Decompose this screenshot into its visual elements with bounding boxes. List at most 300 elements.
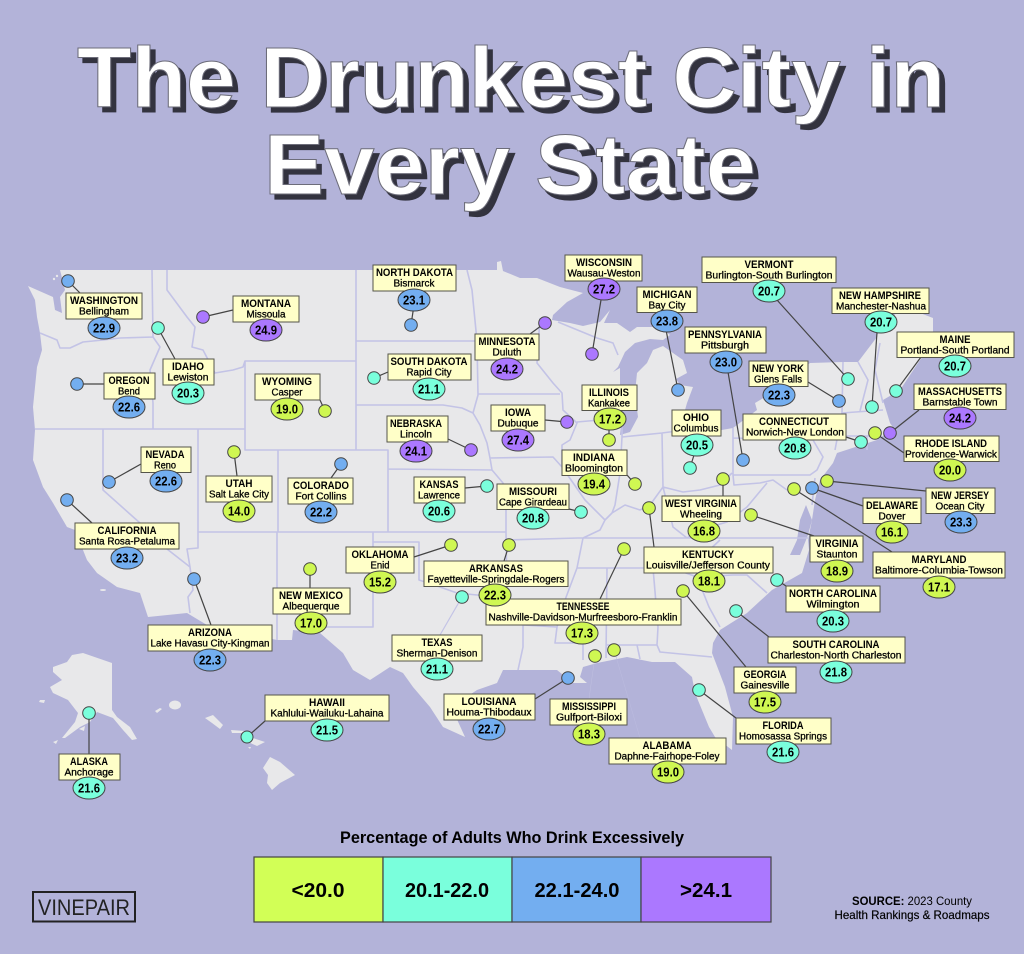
source note: SOURCE: 2023 County	[852, 894, 972, 908]
title: The Drunkest City in	[77, 31, 945, 126]
value: 17.1	[928, 580, 950, 594]
label	[562, 450, 627, 476]
label: SOUTH CAROLINA	[792, 639, 880, 651]
label: MARYLAND	[912, 554, 967, 566]
label: Nashville-Davidson-Murfreesboro-Franklin	[488, 612, 678, 624]
leader line	[589, 656, 595, 699]
callout: Kansas	[414, 477, 493, 522]
label: Gulfport-Biloxi	[556, 712, 622, 724]
value: 19.0	[276, 402, 298, 416]
pin	[821, 475, 833, 487]
value	[753, 280, 785, 302]
label	[873, 552, 1005, 578]
callout: North Dakota	[373, 265, 456, 331]
label: Casper	[272, 386, 303, 398]
value: 20.0	[939, 462, 961, 478]
label: Columbus	[674, 422, 718, 434]
value: 21.5	[316, 722, 338, 738]
label: GEORGIA	[744, 669, 787, 681]
leader line	[608, 425, 610, 440]
value: 18.3	[578, 726, 600, 742]
source note: Health Rankings & Roadmaps	[834, 908, 990, 922]
callout: Idaho	[152, 322, 214, 404]
label: NEW MEXICO	[279, 590, 343, 602]
pin	[629, 478, 641, 490]
pin	[890, 385, 902, 397]
label	[75, 523, 179, 549]
label: Bloomington	[565, 462, 623, 474]
label	[904, 436, 999, 462]
label: Baltimore-Columbia-Towson	[875, 564, 1003, 576]
label: LOUISIANA	[462, 696, 517, 708]
leader line	[535, 678, 568, 699]
callout: South Dakota	[368, 354, 471, 400]
label	[734, 667, 796, 693]
leader line	[846, 437, 861, 442]
callout: Utah	[206, 446, 272, 522]
legend swatch: under 20.0: <20.0	[292, 880, 344, 902]
label	[702, 257, 836, 282]
legend swatch: over 24.1: >24.1	[680, 880, 732, 902]
label: IOWA	[505, 407, 531, 419]
label: Burlington-South Burlington	[706, 270, 833, 282]
pin	[717, 473, 729, 485]
pin	[228, 446, 240, 458]
callout: Minnesota	[475, 317, 551, 380]
callout: Louisiana	[444, 672, 574, 740]
label: Dover	[878, 510, 906, 522]
label: Gainesville	[740, 680, 790, 692]
pin	[608, 644, 620, 656]
leader line	[890, 410, 919, 433]
label: Salt Lake City	[209, 488, 270, 500]
callout: Delaware	[806, 482, 921, 543]
callout: Ohio	[672, 410, 721, 474]
pin	[465, 444, 477, 456]
label	[637, 287, 697, 312]
label: Santa Rosa-Petaluma	[79, 536, 175, 548]
label	[497, 484, 569, 510]
label: WYOMING	[262, 376, 312, 388]
leader line	[683, 591, 746, 667]
label	[104, 373, 155, 399]
callout: Kentucky	[643, 502, 773, 592]
label: NEW JERSEY	[931, 490, 990, 502]
callout: Oregon	[71, 373, 155, 418]
label	[273, 588, 350, 614]
label: Daphne-Fairhope-Foley	[614, 750, 720, 762]
callout: Iowa	[491, 405, 573, 451]
value: 24.1	[405, 444, 427, 458]
title	[77, 31, 950, 218]
label: ALASKA	[70, 756, 108, 768]
pin	[737, 454, 749, 466]
leader line	[320, 400, 325, 411]
value	[923, 576, 955, 598]
pin	[368, 372, 380, 384]
pin	[456, 591, 468, 603]
callout: South Carolina	[730, 605, 905, 683]
legend	[254, 828, 771, 922]
callout: California	[61, 494, 179, 569]
title: The Drunkest City in	[82, 36, 950, 131]
label: NEW HAMPSHIRE	[839, 290, 921, 302]
label	[255, 374, 320, 400]
label	[387, 416, 448, 442]
label: Wausau-Weston	[568, 268, 641, 280]
value: 23.2	[116, 550, 138, 566]
callout: New Mexico	[273, 563, 350, 634]
label: Wheeling	[680, 508, 722, 520]
pin	[833, 395, 845, 407]
pin	[62, 275, 74, 287]
value	[311, 719, 343, 741]
label	[414, 477, 465, 503]
label: Dubuque	[498, 418, 539, 430]
callout: Tennessee	[486, 543, 681, 644]
pin	[197, 311, 209, 323]
label: Ocean City	[936, 500, 985, 512]
label: Glens Falls	[754, 374, 802, 386]
value: 22.3	[199, 652, 221, 668]
callout: Michigan	[637, 287, 697, 396]
label: Barnstable Town	[922, 396, 998, 408]
label: Kankakee	[588, 398, 630, 410]
leader line	[777, 580, 786, 586]
label	[672, 410, 721, 436]
logo: VinePair: VINEPAIR	[38, 895, 130, 920]
value: 23.8	[656, 314, 678, 328]
label: Staunton	[816, 548, 858, 560]
pin	[869, 427, 881, 439]
pin	[730, 605, 742, 617]
callout: Maryland	[788, 483, 1005, 598]
leader line	[777, 300, 848, 379]
label: WEST VIRGINIA	[665, 498, 737, 510]
leader line	[808, 382, 839, 401]
label	[550, 699, 627, 725]
leader line	[699, 690, 736, 718]
callout: Nebraska	[387, 416, 477, 462]
label	[141, 447, 191, 472]
legend swatch: over 24.1	[641, 857, 771, 922]
label: Norwich-New London	[746, 426, 844, 438]
callout: Mississippi	[550, 650, 627, 745]
label: MASSACHUSETTS	[918, 386, 1002, 398]
label	[786, 586, 880, 612]
label: Lake Havasu City-Kingman	[150, 638, 270, 650]
value: 16.8	[693, 524, 715, 538]
title: Every State	[269, 123, 761, 218]
value: 17.0	[300, 616, 322, 630]
label: Anchorage	[64, 766, 114, 778]
label: Wilmington	[806, 598, 860, 610]
leader line	[736, 611, 769, 637]
label: Kahlului-Wailuku-Lahaina	[270, 708, 384, 720]
callout: Pennsylvania	[685, 327, 766, 466]
label: DELAWARE	[866, 500, 918, 512]
label	[491, 405, 545, 431]
label: MICHIGAN	[642, 289, 692, 301]
label	[644, 547, 773, 573]
legend swatch: 20.1-22.0	[383, 857, 512, 922]
leader line	[331, 464, 341, 478]
leader line	[812, 488, 863, 506]
label: Bend	[118, 386, 140, 398]
label: NEBRASKA	[390, 418, 442, 430]
pin	[539, 317, 551, 329]
pin	[188, 573, 200, 585]
label	[749, 361, 808, 386]
pin	[693, 684, 705, 696]
label: SOUTH DAKOTA	[390, 356, 468, 368]
value: 23.0	[715, 354, 737, 370]
label: Charleston-North Charleston	[770, 650, 902, 662]
source note	[834, 894, 990, 922]
leader line	[722, 479, 724, 496]
label	[233, 296, 299, 322]
callout: Nevada	[103, 447, 191, 492]
callout: Rhode Island	[869, 427, 999, 481]
callout: Oklahoma	[346, 539, 457, 593]
label: MONTANA	[241, 298, 291, 310]
leader line	[88, 713, 90, 754]
label	[897, 332, 1014, 358]
value: 21.1	[418, 382, 440, 396]
label: WISCONSIN	[576, 257, 632, 269]
value: 17.2	[599, 412, 621, 426]
leader line	[77, 383, 104, 385]
value: 20.7	[870, 314, 892, 330]
label	[475, 334, 539, 360]
callout: North Carolina	[771, 574, 880, 632]
label: Lawrence	[418, 490, 460, 502]
leader line	[448, 439, 471, 450]
leader line	[414, 545, 451, 557]
value: 22.9	[93, 320, 115, 336]
label: INDIANA	[573, 452, 615, 464]
callout: Illinois	[582, 385, 637, 446]
label: Bismarck	[394, 278, 435, 290]
pin	[445, 539, 457, 551]
label	[206, 476, 272, 502]
label	[288, 478, 353, 504]
label	[59, 754, 120, 780]
label: Louisville/Jefferson County	[646, 560, 771, 572]
value: 27.2	[593, 282, 615, 296]
value: 22.3	[484, 588, 506, 602]
callout: New Jersey	[821, 475, 995, 533]
pin	[684, 462, 696, 474]
callout: Indiana	[562, 450, 641, 495]
map: Hawaii	[155, 700, 295, 790]
pin	[71, 378, 83, 390]
label: IDAHO	[172, 361, 204, 373]
label	[373, 265, 456, 291]
label: OHIO	[683, 412, 709, 424]
label: ILLINOIS	[589, 387, 629, 399]
value: 17.5	[754, 694, 776, 710]
label: UTAH	[226, 478, 253, 490]
pin	[503, 539, 515, 551]
value: 23.1	[403, 292, 425, 308]
leader line	[690, 455, 694, 468]
legend title: Percentage of Adults Who Drink Excessively	[340, 828, 685, 847]
pin	[562, 672, 574, 684]
label	[662, 496, 740, 522]
callout: Alaska	[59, 707, 120, 799]
value: 20.3	[822, 614, 844, 628]
label	[424, 561, 568, 586]
label	[768, 637, 905, 663]
pin	[335, 458, 347, 470]
callout: Colorado	[288, 458, 353, 523]
pin	[603, 434, 615, 446]
value: 21.6	[78, 780, 100, 796]
label	[66, 293, 142, 319]
label: Bay City	[648, 300, 686, 312]
callout: Vermont	[702, 257, 854, 385]
value	[820, 661, 852, 683]
label: ARKANSAS	[469, 563, 523, 575]
label: RHODE ISLAND	[915, 438, 987, 450]
pin	[103, 476, 115, 488]
leader line	[411, 305, 414, 325]
label: NORTH CAROLINA	[789, 588, 877, 600]
leader line	[627, 475, 635, 484]
leader line	[440, 597, 462, 635]
label	[743, 414, 846, 440]
label: WASHINGTON	[70, 295, 138, 307]
label: Fort Collins	[296, 490, 346, 502]
label	[148, 625, 272, 651]
label: Lincoln	[400, 428, 432, 440]
label: ALABAMA	[642, 740, 692, 752]
label: NEVADA	[146, 449, 185, 461]
label	[163, 359, 214, 385]
leader line	[504, 545, 509, 561]
label: OKLAHOMA	[352, 549, 409, 561]
pin	[771, 574, 783, 586]
leader line	[194, 579, 211, 625]
callout: Montana	[197, 296, 299, 341]
label: CALIFORNIA	[98, 525, 157, 537]
leader line	[728, 372, 743, 460]
leader line	[203, 310, 233, 317]
callout: Wisconsin	[565, 255, 642, 360]
pin	[405, 319, 417, 331]
callout: New York	[749, 361, 845, 407]
label: FLORIDA	[762, 720, 804, 732]
leader line	[614, 650, 640, 738]
label	[265, 695, 389, 721]
label: MAINE	[940, 334, 970, 346]
callout: New Hampshire	[832, 288, 929, 413]
leader line	[875, 433, 904, 453]
map: Alaska	[39, 653, 137, 744]
label: KANSAS	[420, 479, 458, 491]
label: TENNESSEE	[556, 601, 610, 613]
value: 27.4	[507, 432, 530, 448]
value: 22.3	[768, 388, 790, 402]
leader line	[600, 549, 624, 599]
label: Reno	[154, 460, 176, 472]
label	[444, 694, 535, 720]
label: HAWAII	[309, 697, 345, 709]
value: 21.1	[426, 662, 448, 676]
pin	[745, 509, 757, 521]
label	[388, 354, 471, 380]
label: MISSISSIPPI	[562, 701, 616, 713]
leader line	[465, 486, 487, 488]
callout: Arkansas	[424, 539, 568, 606]
value: 22.6	[155, 474, 177, 488]
label: MINNESOTA	[478, 336, 536, 348]
label: PENNSYLVANIA	[688, 329, 762, 341]
label: Duluth	[492, 346, 522, 358]
label	[926, 488, 995, 514]
title: Every State	[264, 118, 756, 213]
label	[685, 327, 766, 353]
callout: Texas	[392, 591, 482, 680]
label	[346, 547, 414, 573]
label	[392, 635, 482, 661]
leader line	[896, 357, 921, 391]
label: Bellingham	[79, 306, 129, 318]
label	[565, 255, 642, 281]
pin	[586, 348, 598, 360]
pin	[304, 563, 316, 575]
label: VERMONT	[744, 259, 794, 271]
callout: Florida	[693, 684, 831, 763]
callout: Georgia	[677, 585, 796, 713]
leader line	[109, 464, 141, 482]
pin	[575, 506, 587, 518]
pin	[241, 731, 253, 743]
label: Manchester-Nashua	[836, 300, 926, 312]
value: 19.0	[657, 764, 679, 780]
label: Homosassa Springs	[739, 730, 827, 742]
value	[479, 584, 511, 606]
leader line	[309, 569, 311, 588]
callout: Washington	[62, 275, 142, 339]
value: 23.3	[950, 514, 972, 530]
label	[832, 288, 929, 314]
label	[914, 384, 1006, 410]
pin	[618, 543, 630, 555]
label: Sherman-Denison	[396, 648, 478, 660]
value: 20.3	[177, 386, 199, 400]
pin	[83, 707, 95, 719]
label: Pittsburgh	[701, 340, 749, 352]
legend swatch: under 20.0	[254, 857, 383, 922]
leader line	[247, 721, 265, 737]
label: Houma-Thibodaux	[446, 706, 532, 718]
value: 21.8	[825, 664, 847, 680]
value: 17.3	[571, 626, 593, 640]
pin	[61, 494, 73, 506]
label: ARIZONA	[188, 627, 232, 639]
label: Lewiston	[168, 372, 209, 384]
value: 22.6	[118, 400, 140, 414]
value: 19.4	[583, 476, 606, 492]
label: Enid	[370, 560, 390, 572]
value: 15.2	[369, 574, 391, 590]
value: 20.5	[686, 438, 708, 452]
value: 20.8	[784, 440, 806, 456]
value: 18.1	[698, 574, 720, 588]
value: 21.6	[772, 744, 794, 760]
